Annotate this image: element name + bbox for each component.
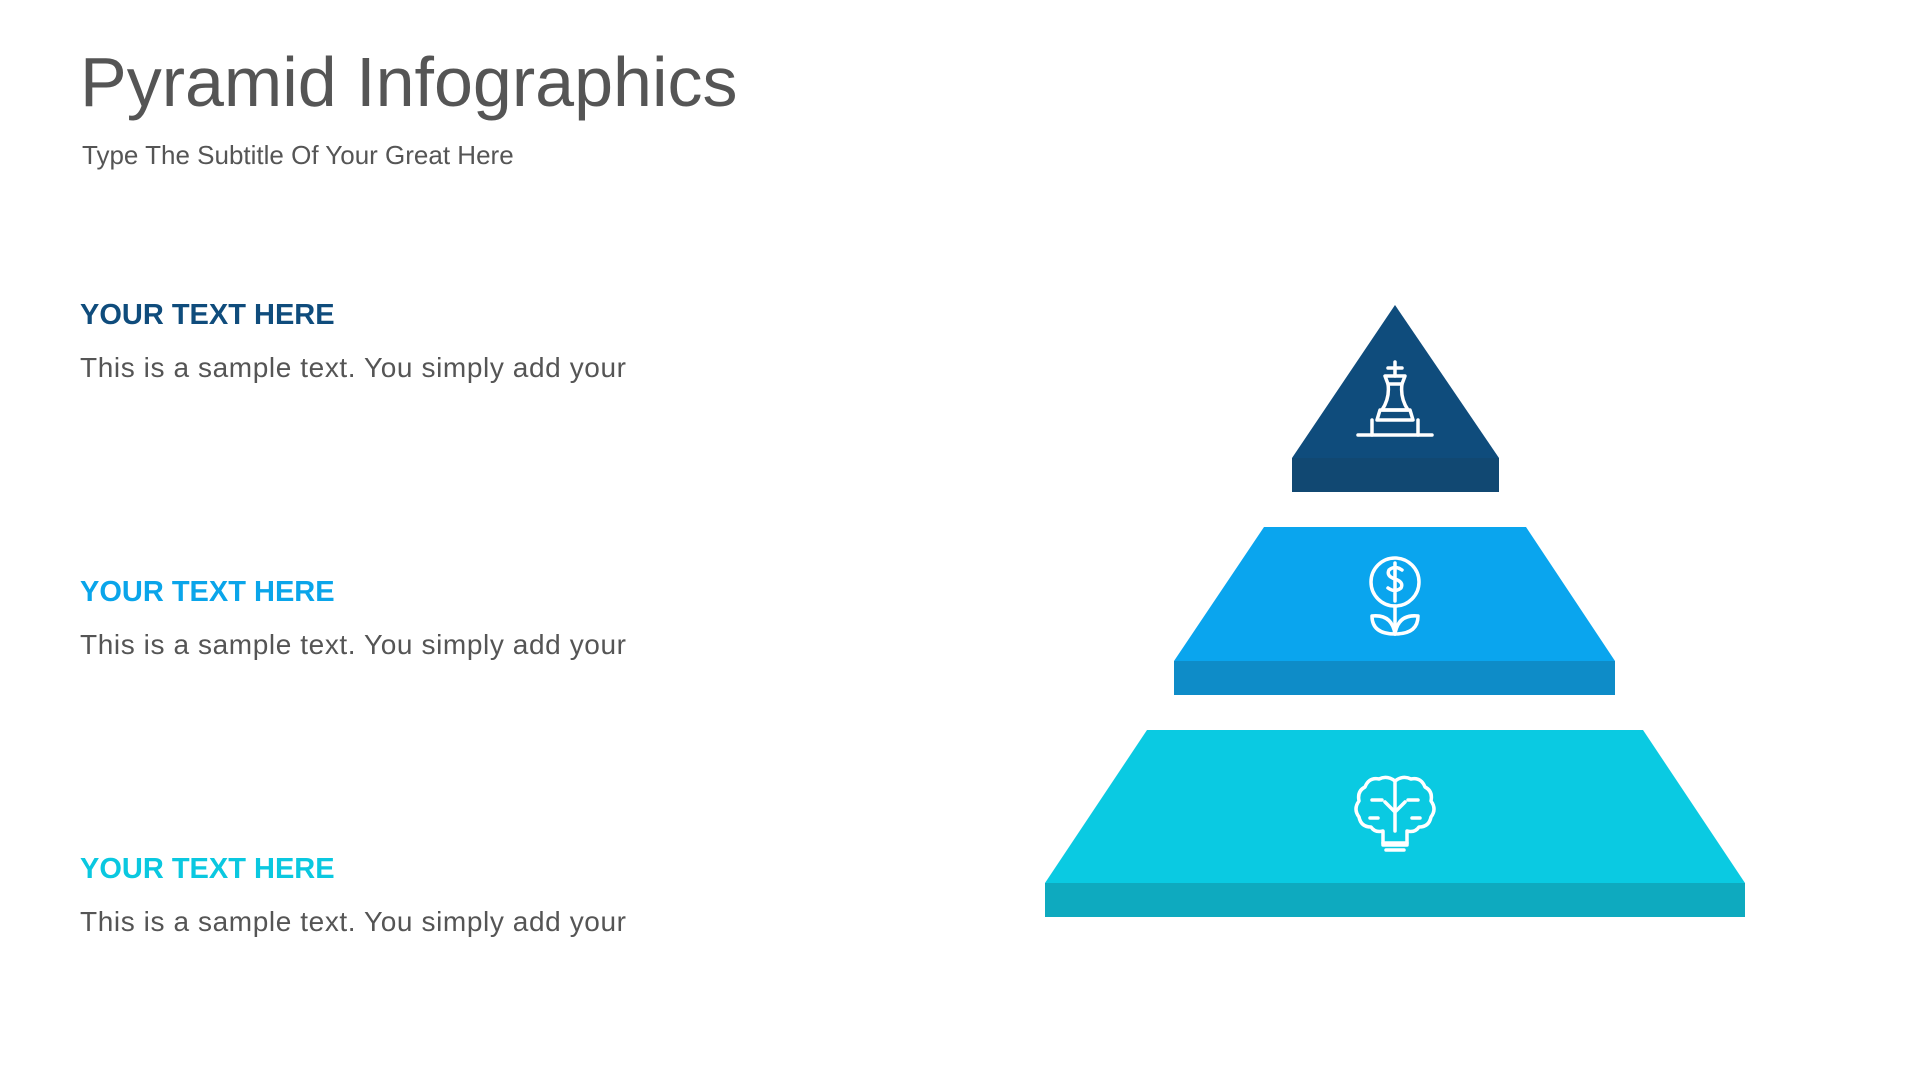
tier 2 [1174,527,1615,695]
icon: chess king [1358,362,1432,435]
tier 3 [1045,730,1745,917]
text block 1 [80,299,627,383]
text block 3 [80,853,627,937]
text block 2 [80,576,627,660]
heading 3: YOUR TEXT HERE [80,853,335,885]
heading 1: YOUR TEXT HERE [80,299,335,331]
body 3: This is a sample text. You simply add your [80,906,627,937]
subtitle: Type The Subtitle Of Your Great Here [82,140,514,170]
heading 2: YOUR TEXT HERE [80,576,335,608]
tier 1 [1292,305,1499,492]
body 1: This is a sample text. You simply add your [80,352,627,383]
icon: brain [1356,777,1434,850]
body 2: This is a sample text. You simply add your [80,629,627,660]
icon: money flower [1371,558,1419,634]
title: Pyramid Infographics [80,43,738,121]
